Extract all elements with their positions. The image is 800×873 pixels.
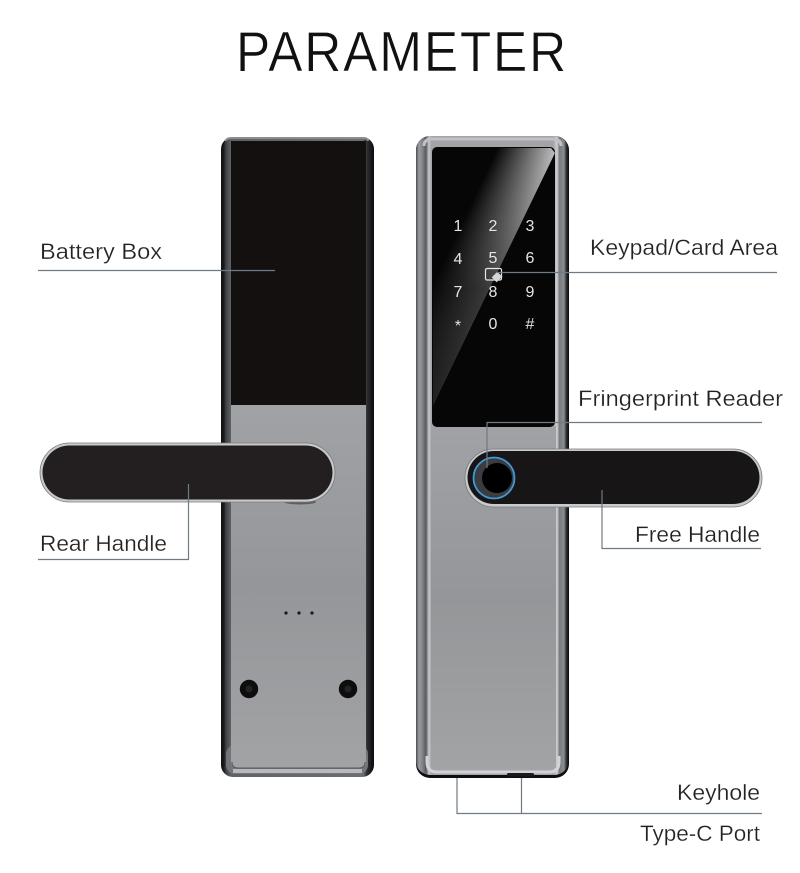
- keypad digits: #: [526, 316, 535, 333]
- label: fingerprint reader: Fringerprint Reader: [578, 386, 783, 411]
- keypad digits: 1: [454, 218, 463, 235]
- keypad digits: 3: [526, 218, 535, 235]
- keypad digits: 7: [454, 284, 463, 301]
- label: keypad: Keypad/Card Area: [590, 235, 779, 260]
- keypad digits: 0: [489, 316, 498, 333]
- keypad digits: [454, 218, 535, 335]
- label: free handle: Free Handle: [635, 522, 760, 547]
- leader lines: keyhole and port: [457, 778, 762, 814]
- leader line: keypad: [497, 272, 777, 274]
- rear handle: [40, 443, 335, 504]
- label: battery box: Battery Box: [40, 239, 162, 264]
- leader line: free handle: [602, 490, 761, 548]
- keypad digits: 5: [489, 250, 498, 267]
- keypad digits: *: [455, 318, 461, 335]
- leader line: battery box: [38, 270, 275, 272]
- keypad digits: 6: [526, 250, 535, 267]
- label: keyhole: Keyhole: [677, 780, 760, 805]
- icon: card reader: [486, 268, 502, 282]
- front lock body: [416, 136, 569, 778]
- keypad digits: 2: [489, 218, 498, 235]
- icon: fingerprint ring: [474, 458, 514, 498]
- rear lock body: [221, 137, 374, 777]
- title: PARAMETER: [236, 20, 568, 84]
- label: rear handle: Rear Handle: [40, 531, 167, 556]
- free handle with fingerprint reader: [465, 449, 762, 507]
- keypad glass panel: [432, 147, 555, 427]
- leader line: rear handle: [38, 484, 188, 560]
- rear screws: [240, 680, 357, 698]
- keypad digits: 4: [454, 251, 463, 268]
- keypad digits: 8: [489, 284, 498, 301]
- leader line: fingerprint reader: [487, 422, 762, 468]
- rear dots: [284, 611, 314, 615]
- keypad digits: 9: [526, 284, 535, 301]
- label: type-c port: Type-C Port: [640, 821, 760, 846]
